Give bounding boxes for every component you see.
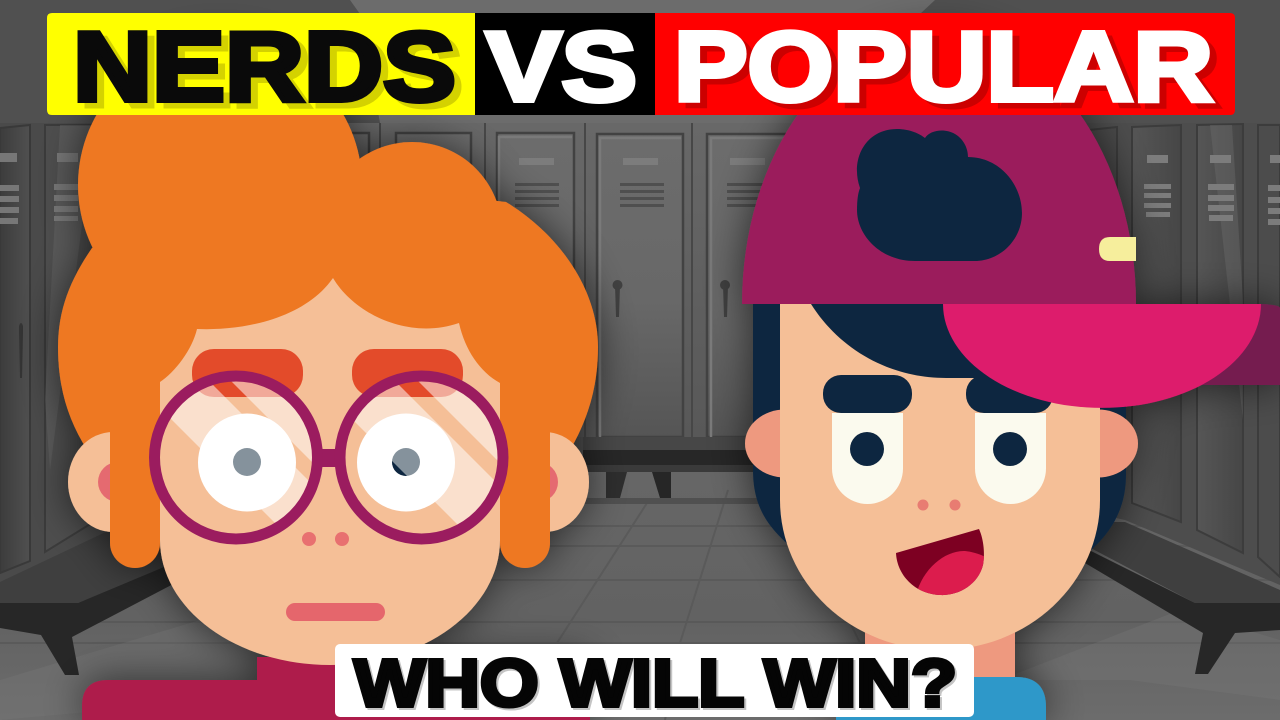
bench: center — [583, 437, 753, 498]
locker handles — [612, 280, 730, 317]
ceiling band — [0, 0, 1280, 123]
banner: vs: VS — [486, 12, 637, 122]
lockers: right wall — [1080, 123, 1280, 585]
nerd mouth — [286, 603, 385, 621]
popular face — [780, 300, 1100, 650]
bench: right — [1085, 522, 1280, 674]
floor tiles — [0, 490, 1280, 720]
banner: popular: POPULAR — [674, 12, 1213, 122]
cap brim back — [1150, 304, 1280, 385]
cap brim — [943, 304, 1261, 408]
nerd character — [42, 115, 618, 720]
nerd body — [82, 657, 590, 720]
popular neck — [865, 625, 1015, 677]
popular hair back — [753, 290, 1126, 555]
floor light patches — [0, 610, 1280, 720]
banner: nerds: NERDS — [80, 17, 463, 127]
popular character — [742, 32, 1280, 720]
banner: nerds: NERDS — [73, 12, 456, 122]
popular eyebrows — [823, 375, 1053, 413]
locker vents — [515, 183, 771, 207]
glasses — [154, 376, 503, 539]
popular front hair — [811, 304, 1040, 378]
subtitle: who will win: WHO WILL WIN? — [354, 646, 957, 720]
nerd eyes — [198, 414, 455, 512]
cap crown — [742, 32, 1136, 304]
title banner — [47, 12, 1235, 127]
cap strap — [1099, 237, 1136, 261]
floor — [0, 472, 1280, 720]
locker frame gaps — [380, 123, 798, 437]
nerd face — [160, 278, 500, 665]
banner: popular: POPULAR — [681, 17, 1220, 127]
cap logo — [857, 129, 1022, 261]
door highlights — [499, 137, 787, 437]
popular mouth — [896, 529, 984, 596]
bench: left — [0, 530, 210, 675]
center lockers frame — [340, 123, 810, 437]
lockers: left wall — [0, 123, 110, 590]
popular ears — [745, 410, 1138, 478]
nerd ears — [68, 432, 589, 532]
nerd eyebrows — [192, 349, 463, 397]
locker doors: center — [348, 133, 789, 437]
nerd hair back — [58, 43, 598, 480]
nerd hair strands — [110, 350, 550, 568]
popular freckles — [918, 500, 960, 510]
door labels — [418, 158, 765, 165]
nerd nose freckles — [302, 532, 349, 546]
glasses reflections — [170, 382, 498, 524]
popular body — [836, 677, 1046, 720]
popular eyes — [832, 413, 1046, 504]
